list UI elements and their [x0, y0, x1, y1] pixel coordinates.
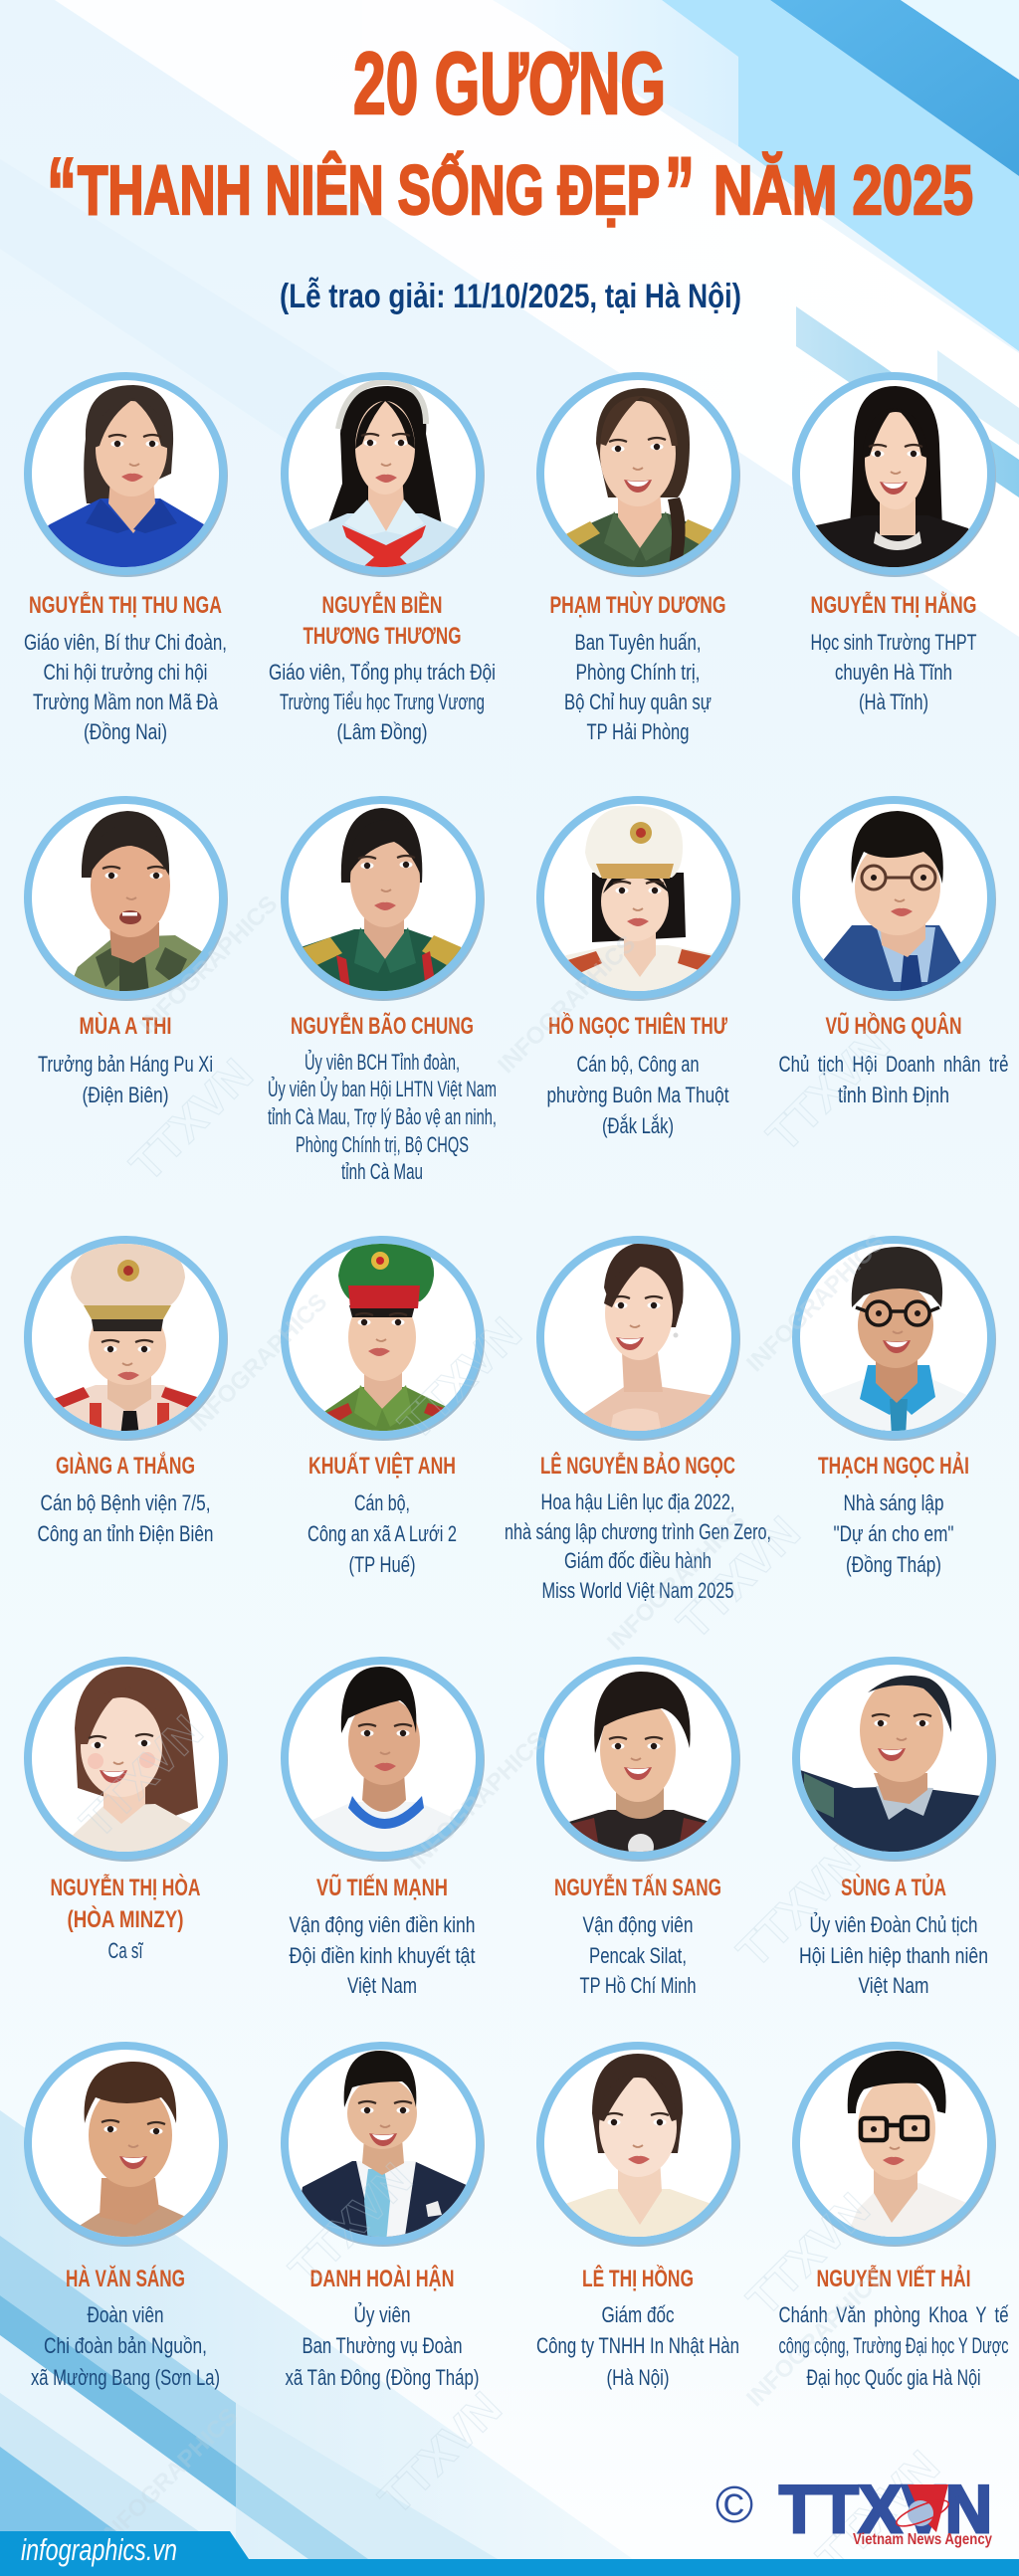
description: Trường Mầm non Mã Đà [33, 690, 218, 714]
description [579, 1912, 697, 1998]
portrait: Thạch Ngọc Hải [792, 1236, 996, 1441]
portrait: Nguyễn Tấn Sang [536, 1657, 740, 1862]
description [268, 1050, 497, 1184]
watermarks: TTXVN [279, 2153, 422, 2295]
name: NGUYỄN BÃO CHUNG [291, 1011, 474, 1040]
portrait: Mùa A Thi [24, 796, 228, 1001]
watermarks: INFOGRAPHICS [403, 1726, 551, 1875]
description: nhà sáng lập chương trình Gen Zero, [505, 1519, 771, 1544]
portrait: Phạm Thùy Dương [536, 372, 740, 577]
portrait: Danh Hoài Hận [281, 2042, 485, 2247]
name: THƯƠNG THƯƠNG [303, 623, 462, 650]
portrait: Lê Thị Hồng [536, 2042, 740, 2247]
watermarks: INFOGRAPHICS [134, 891, 283, 1039]
description [810, 630, 977, 714]
name [50, 1873, 201, 1933]
description: "Dự án cho em" [834, 1521, 954, 1546]
title: “ [47, 137, 77, 249]
portrait: Khuất Việt Anh [281, 1236, 485, 1441]
portrait: Sùng A Tủa [792, 1657, 996, 1862]
description [31, 2302, 220, 2390]
card: Hồ Ngọc Thiên Thư [536, 796, 740, 1138]
description [289, 1912, 476, 1998]
description: Giám đốc [601, 2302, 675, 2327]
name: NGUYỄN TẤN SANG [554, 1873, 721, 1901]
description [536, 2302, 739, 2390]
description [505, 1489, 771, 1603]
description: Ca sĩ [107, 1938, 144, 1963]
description [38, 1490, 213, 1546]
description: Chi đoàn bản Nguồn, [44, 2333, 207, 2358]
copyright symbol: © [715, 2477, 753, 2534]
portrait: Vũ Hồng Quân [792, 796, 996, 1001]
name: KHUẤT VIỆT ANH [308, 1452, 456, 1480]
description [547, 1052, 729, 1138]
card: Nguyễn Thị Hòa (Hòa Minzy) [24, 1657, 228, 1963]
watermarks [70, 891, 949, 2576]
description: (TP Huế) [348, 1552, 416, 1577]
card: Thạch Ngọc Hải [792, 1236, 996, 1577]
description: Cán bộ, Công an [577, 1052, 699, 1077]
description: (Hà Nội) [607, 2365, 669, 2390]
description: (Đồng Nai) [84, 719, 167, 744]
description: Đoàn viên [88, 2302, 163, 2327]
description: (Lâm Đồng) [336, 719, 428, 744]
name: LÊ THỊ HỒNG [582, 2265, 694, 2292]
name: GIÀNG A THẮNG [56, 1452, 195, 1480]
description: Công ty TNHH In Nhật Hàn [536, 2333, 739, 2358]
name: (HÒA MINZY) [68, 1905, 183, 1933]
name: HÀ VĂN SÁNG [66, 2265, 185, 2292]
description [24, 630, 227, 744]
bottom bar [0, 2531, 1019, 2576]
description: xã Tân Đông (Đồng Tháp) [285, 2365, 480, 2390]
watermarks: INFOGRAPHICS [184, 1288, 332, 1437]
description: Nhà sáng lập [844, 1490, 943, 1515]
portrait: Nguyễn Thị Hằng [792, 372, 996, 577]
description: phường Buôn Ma Thuột [547, 1083, 729, 1107]
name: SÙNG A TỦA [841, 1873, 946, 1901]
watermarks: TTXVN [667, 1506, 810, 1649]
portrait: Nguyễn Bão Chung [281, 796, 485, 1001]
subtitle: (Lễ trao giải: 11/10/2025, tại Hà Nội) [280, 278, 741, 315]
portrait: Nguyễn Thị Thu Nga [24, 372, 228, 577]
card: Mùa A Thi [24, 796, 228, 1107]
description [778, 1052, 1009, 1107]
portrait: Nguyễn Viết Hải [792, 2042, 996, 2247]
watermarks: TTXVN [388, 1307, 531, 1450]
card: Nguyễn Thị Thu Nga [24, 372, 228, 744]
portrait: Hồ Ngọc Thiên Thư [536, 796, 740, 1001]
description: tỉnh Cà Mau [341, 1159, 423, 1184]
name: LÊ NGUYỄN BẢO NGỌC [540, 1451, 735, 1480]
description: (Đồng Tháp) [846, 1552, 941, 1577]
logo: TTXVN: Vietnam News Agency [853, 2531, 992, 2548]
portrait: Lê Nguyễn Bảo Ngọc [536, 1236, 740, 1441]
name: NGUYỄN BIỀN [322, 590, 442, 619]
description: Bộ Chỉ huy quân sự [564, 690, 712, 714]
description [778, 2302, 1009, 2390]
description: Việt Nam [347, 1973, 417, 1998]
watermarks: INFOGRAPHICS [741, 1229, 890, 1377]
description: xã Mường Bang (Sơn La) [31, 2365, 220, 2390]
card: Nguyễn Thị Hằng [792, 372, 996, 714]
description: Giám đốc điều hành [564, 1548, 712, 1573]
description [285, 2302, 480, 2390]
description: tỉnh Bình Định [838, 1083, 949, 1107]
name: VŨ HỒNG QUÂN [826, 1012, 961, 1040]
description: chuyên Hà Tĩnh [835, 660, 952, 685]
description [307, 1490, 457, 1577]
portrait: Nguyễn Thị Hòa [24, 1657, 228, 1862]
card: Nguyễn Tấn Sang [536, 1657, 740, 1998]
description: Giáo viên, Bí thư Chi đoàn, [24, 630, 227, 655]
description: Pencak Silat, [589, 1943, 687, 1968]
name: NGUYỄN THỊ THU NGA [29, 590, 222, 619]
watermarks: INFOGRAPHICS [741, 2264, 890, 2412]
portrait: Hà Văn Sáng [24, 2042, 228, 2247]
watermarks: TTXVN [70, 1705, 213, 1848]
description: Vận động viên điền kinh [289, 1912, 476, 1937]
card: Nguyễn Viết Hải [778, 2042, 1009, 2390]
watermarks: TTXVN [368, 2382, 511, 2524]
site label: infographics.vn [21, 2532, 177, 2567]
card: Phạm Thùy Dương [536, 372, 740, 744]
name: VŨ TIẾN MẠNH [316, 1874, 448, 1901]
description [38, 1052, 213, 1107]
watermarks: TTXVN [726, 1835, 870, 1977]
title: THANH NIÊN SỐNG ĐẸP [78, 150, 660, 229]
name: MÙA A THI [80, 1012, 171, 1040]
description: Ban Thường vụ Đoàn [303, 2333, 462, 2358]
description: Trưởng bản Háng Pu Xi [38, 1052, 213, 1077]
name: PHẠM THÙY DƯƠNG [549, 591, 726, 619]
card: Lê Nguyễn Bảo Ngọc [505, 1236, 771, 1603]
title [47, 34, 973, 249]
description: Miss World Việt Nam 2025 [541, 1578, 734, 1603]
card: Lê Thị Hồng [536, 2042, 740, 2390]
description: tỉnh Cà Mau, Trợ lý Bảo vệ an ninh, [268, 1104, 497, 1129]
description: Phòng Chính trị, Bộ CHQS [296, 1132, 469, 1157]
watermarks: INFOGRAPHICS [95, 2403, 243, 2551]
description: Chi hội trưởng chi hội [44, 660, 207, 685]
description: TP Hải Phòng [587, 719, 689, 744]
description [564, 630, 712, 744]
description: Ủy viên BCH Tỉnh đoàn, [305, 1050, 460, 1075]
card: Vũ Hồng Quân [778, 796, 1009, 1107]
description: Trường Tiểu học Trưng Vương [280, 690, 485, 714]
name: NGUYỄN THỊ HÒA [50, 1873, 201, 1901]
portrait: Vũ Tiến Mạnh [281, 1657, 485, 1862]
description: Ủy viên [354, 2302, 410, 2327]
watermarks: TTXVN [756, 1019, 900, 1161]
card: Nguyễn Bão Chung [268, 796, 497, 1184]
name [303, 590, 462, 650]
name: HỒ NGỌC THIÊN THƯ [548, 1012, 727, 1040]
watermarks: TTXVN [119, 1049, 263, 1191]
portrait: Giàng A Thắng [24, 1236, 228, 1441]
card: Danh Hoài Hận [281, 2042, 485, 2390]
title: 20 GƯƠNG [353, 34, 666, 132]
description: Cán bộ Bệnh viện 7/5, [40, 1490, 211, 1515]
description: Công an tỉnh Điện Biên [38, 1521, 213, 1546]
name: DANH HOÀI HẬN [310, 2265, 454, 2292]
description: (Hà Tĩnh) [859, 690, 928, 714]
card: Khuất Việt Anh [281, 1236, 485, 1577]
description [799, 1912, 988, 1998]
description: (Điện Biên) [82, 1083, 169, 1107]
description: Ban Tuyên huấn, [575, 630, 701, 655]
description: Đội điền kinh khuyết tật [289, 1943, 476, 1968]
description: Hoa hậu Liên lục địa 2022, [541, 1489, 734, 1514]
description: Công an xã A Lưới 2 [307, 1521, 457, 1546]
card: Vũ Tiến Mạnh [281, 1657, 485, 1998]
description: Ủy viên Ủy ban Hội LHTN Việt Nam [268, 1077, 497, 1101]
description: Giáo viên, Tổng phụ trách Đội [269, 660, 496, 685]
watermarks: INFOGRAPHICS [493, 930, 641, 1079]
description: Việt Nam [858, 1973, 929, 1998]
card: Hà Văn Sáng [24, 2042, 228, 2390]
card: Sùng A Tủa [792, 1657, 996, 1998]
watermarks: INFOGRAPHICS [602, 1507, 750, 1656]
title: ” [665, 137, 695, 249]
description [834, 1490, 954, 1577]
description: TP Hồ Chí Minh [579, 1973, 697, 1998]
description [269, 660, 496, 744]
watermarks: TTXVN [736, 2183, 880, 2325]
portrait: Nguyễn Biền Thương Thương [281, 372, 485, 577]
description: (Đắk Lắk) [602, 1113, 674, 1138]
description: Cán bộ, [354, 1490, 410, 1515]
description: Vận động viên [583, 1912, 693, 1937]
description: Phòng Chính trị, [575, 660, 701, 685]
logo: TTXVN: TTXVN [779, 2472, 992, 2547]
card: Giàng A Thắng [24, 1236, 228, 1546]
card: Nguyễn Biền Thương Thương [269, 372, 496, 744]
